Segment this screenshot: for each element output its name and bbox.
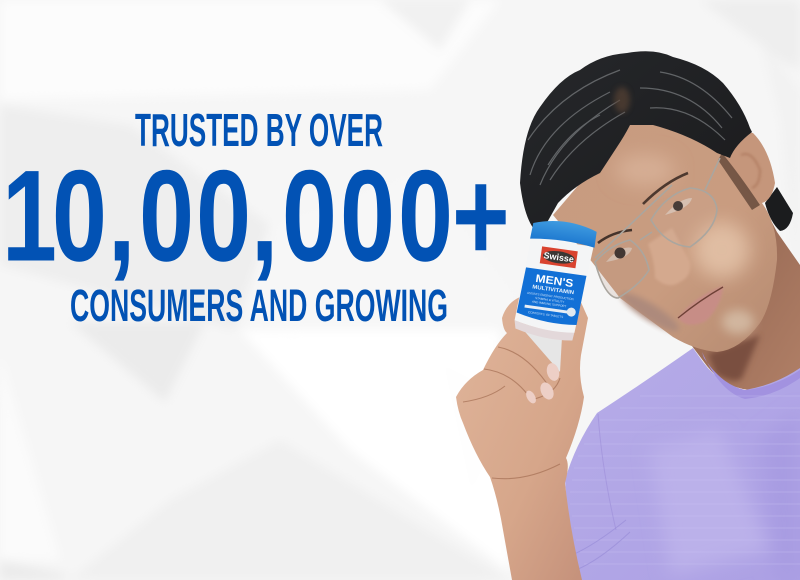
label benefit text: ASSISTS ENERGY PRODUCTION	[527, 291, 574, 301]
face highlights and shading	[615, 154, 754, 337]
label benefit text: STAMINA & VITALITY	[535, 296, 565, 304]
sideburn	[718, 153, 760, 210]
bottle cap	[530, 217, 597, 248]
gap between index finger and thumb	[520, 326, 562, 372]
fingernails	[521, 293, 561, 405]
subheading: consumers and growing: CONSUMERS AND GROWING	[70, 280, 448, 331]
finger creases	[463, 347, 560, 479]
t-shirt	[565, 348, 800, 580]
supplement bottle: MULTIVITAMIN	[532, 284, 574, 296]
Swisse logo	[540, 246, 578, 268]
hand and forearm	[456, 293, 588, 580]
big number: 10,00,000+	[2, 143, 510, 289]
supplement bottle	[513, 217, 597, 343]
label benefit text: AND IMMUNE SUPPORT	[532, 300, 567, 308]
mouth	[678, 286, 723, 325]
glasses	[595, 158, 720, 298]
nose	[648, 228, 690, 285]
bottle bottom	[513, 320, 575, 342]
eyes and brows	[598, 173, 692, 262]
man in lavender t-shirt	[520, 51, 800, 580]
ear inner shadow	[741, 154, 760, 188]
blue label	[516, 267, 586, 327]
supplement bottle: Swisse	[543, 250, 575, 264]
bottle body	[514, 237, 594, 335]
label benefit text: CONTENTS: 60 TABLETS	[528, 310, 563, 319]
product name: MEN'S	[535, 273, 574, 290]
hair	[520, 51, 752, 235]
face	[553, 115, 777, 352]
label benefit text	[524, 291, 574, 320]
back hair tuft	[765, 187, 793, 231]
neck	[680, 200, 800, 390]
ear	[722, 133, 775, 203]
chin shadow	[708, 335, 760, 381]
heading: trusted by over: TRUSTED BY OVER	[135, 104, 383, 156]
